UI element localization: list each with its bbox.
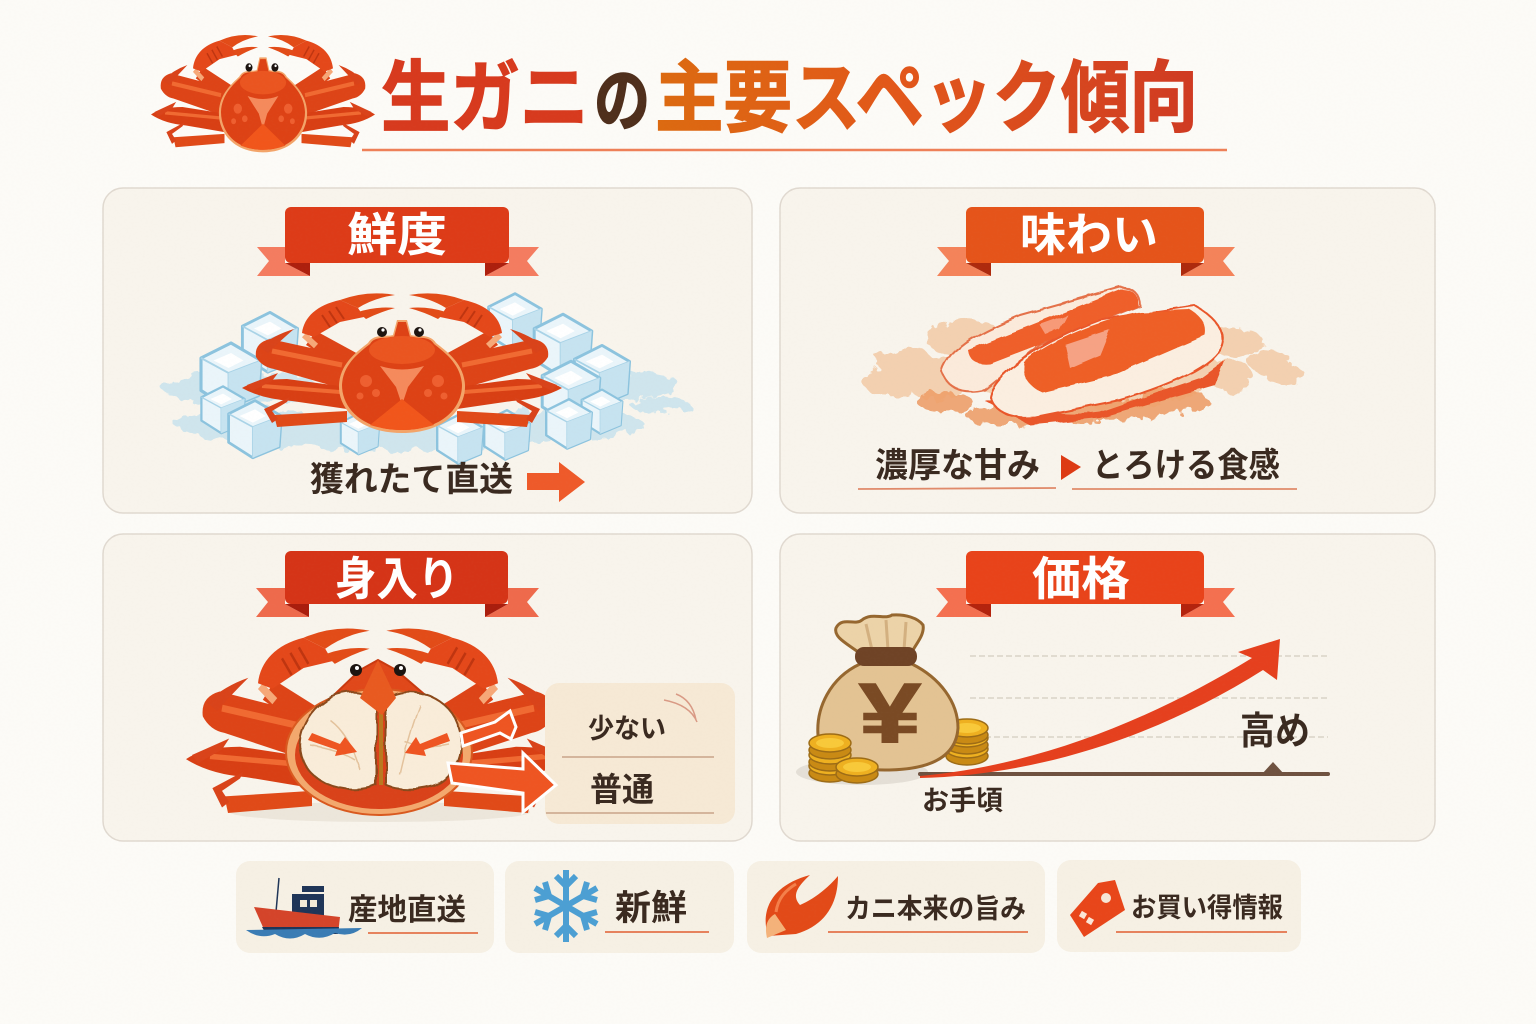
badge: direct from origin <box>236 861 494 953</box>
label: bargain: お買い得情報 <box>1131 893 1283 923</box>
illustration: opened crab <box>186 628 570 822</box>
badge: fresh <box>505 861 734 953</box>
label: normal: 普通 <box>590 771 654 808</box>
chart: baseline <box>920 762 1328 774</box>
icon: crab claw <box>766 875 838 938</box>
label: fresh: 新鮮 <box>615 889 687 928</box>
arrow: delivery <box>527 462 585 502</box>
arrow: triangle <box>1061 455 1081 480</box>
label: true flavor: カニ本来の旨み <box>845 894 1026 924</box>
title <box>381 54 1198 142</box>
illustration: money bag: ¥ <box>859 666 921 760</box>
ribbon: meat fill: 身入り <box>335 553 459 605</box>
ribbon: price <box>936 551 1235 617</box>
label: direct: 産地直送 <box>348 894 466 927</box>
title underline <box>362 149 1227 151</box>
ribbon: price: 価格 <box>1032 553 1130 605</box>
title: の <box>594 62 650 140</box>
badge: bargain info <box>1057 860 1301 952</box>
label: little: 少ない <box>588 714 666 744</box>
caption: melting texture: とろける食感 <box>1092 447 1280 485</box>
icon: price tag <box>1070 880 1125 937</box>
illustration: crab meat <box>864 287 1305 425</box>
illustration: money bag <box>796 615 988 785</box>
ribbon: flavor <box>937 207 1235 276</box>
ribbon: freshness <box>257 207 539 276</box>
illustration: crab on ice <box>162 293 690 464</box>
table: amount <box>545 683 735 824</box>
label: high: 高め <box>1240 711 1310 753</box>
panel: meat fill <box>103 534 752 841</box>
icon: fishing boat <box>246 878 362 938</box>
title: 生ガニ <box>381 54 589 142</box>
caption: rich sweetness: 濃厚な甘み <box>875 447 1040 485</box>
caption: direct delivery: 獲れたて直送 <box>310 461 513 499</box>
arrow: rising price <box>920 639 1280 778</box>
arrows: meat indicators <box>308 711 556 812</box>
title: 主要スペック傾向 <box>655 54 1198 142</box>
panel: freshness <box>103 188 752 513</box>
panel: flavor <box>780 188 1435 513</box>
label: affordable: お手頃 <box>922 786 1003 816</box>
panel: price <box>780 534 1435 841</box>
ribbon: meat fill <box>256 551 539 617</box>
ribbon: flavor: 味わい <box>1020 209 1158 261</box>
icon: title crab <box>151 35 375 152</box>
badge: true flavor <box>747 861 1045 953</box>
ribbon: freshness: 鮮度 <box>347 209 447 261</box>
icon: snowflake <box>535 870 597 942</box>
